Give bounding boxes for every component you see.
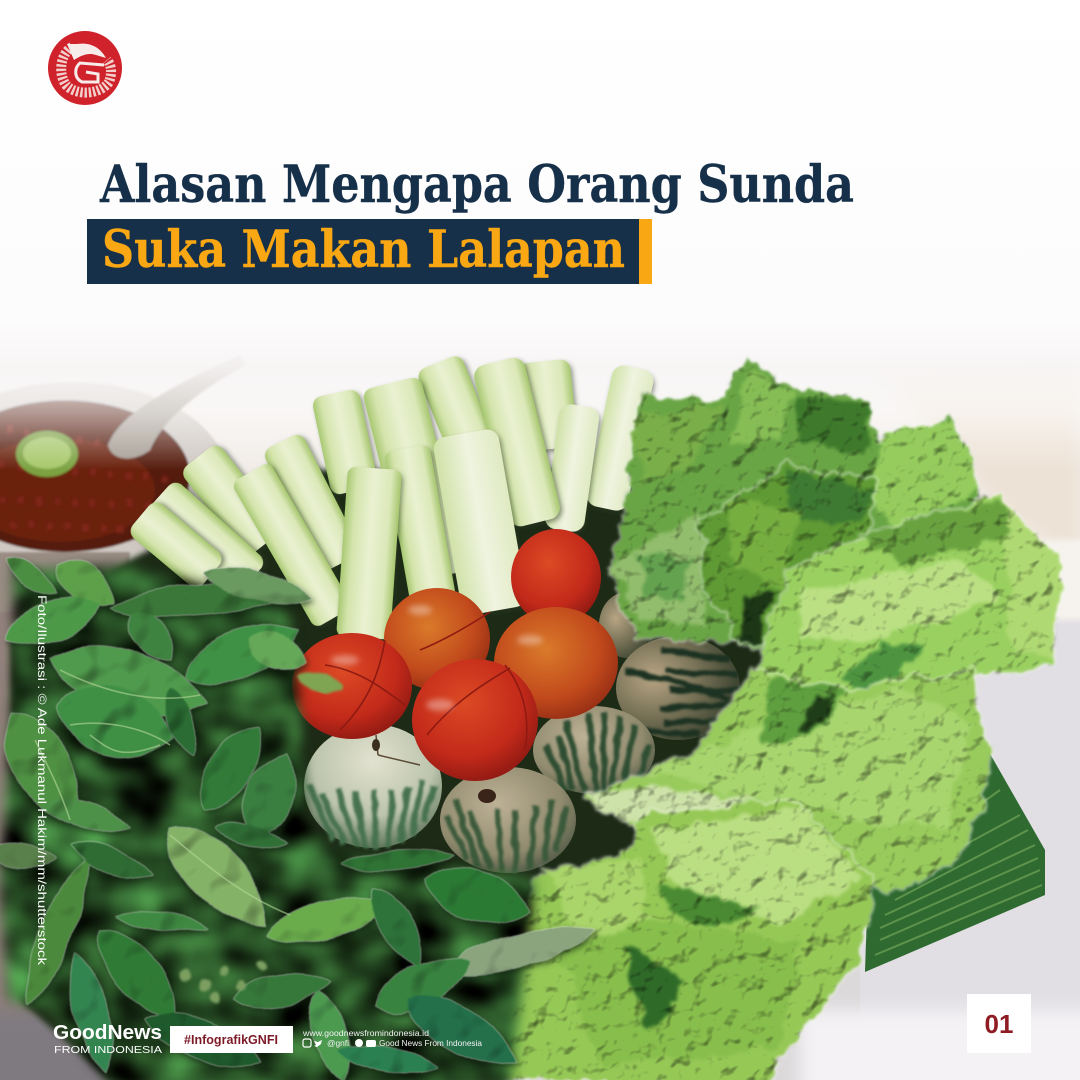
page number: 01 <box>985 1009 1013 1039</box>
hashtag box: #InfografikGNFI <box>184 1033 278 1047</box>
banana leaf <box>865 710 1045 972</box>
footer branding <box>53 1022 483 1056</box>
lettuce <box>490 360 1060 1080</box>
striped eggplants <box>304 592 740 873</box>
social links <box>302 1029 483 1048</box>
social links: @gnfi <box>327 1039 349 1048</box>
table surface <box>0 320 1080 1080</box>
photo credit: Foto/Ilustrasi : © Ade Lukmanul Hakim/mm/shutterstock <box>35 595 49 966</box>
flower buds <box>179 960 267 1003</box>
logo: GNFI dragon emblem <box>48 31 122 105</box>
hashtag box <box>170 1026 293 1053</box>
social links: Good News From Indonesia <box>379 1039 483 1048</box>
page number <box>967 994 1031 1053</box>
social links: www.goodnewsfromindonesia.id <box>302 1029 429 1038</box>
GoodNews wordmark: GoodNews <box>53 1022 162 1044</box>
cucumbers <box>127 353 656 640</box>
haze fade over background <box>0 0 1080 470</box>
title line 2 banner: Suka Makan Lalapan <box>102 220 625 280</box>
basil leaves <box>0 546 599 1080</box>
dark plate shadow <box>10 470 800 1080</box>
GoodNews wordmark <box>53 1022 162 1056</box>
sambal bowl <box>0 355 246 612</box>
basil mass <box>0 565 535 1080</box>
tomatoes <box>292 529 618 781</box>
flower spike <box>296 668 344 696</box>
GoodNews wordmark: FROM INDONESIA <box>54 1044 162 1056</box>
title line 1: Alasan Mengapa Orang Sunda <box>99 155 854 215</box>
